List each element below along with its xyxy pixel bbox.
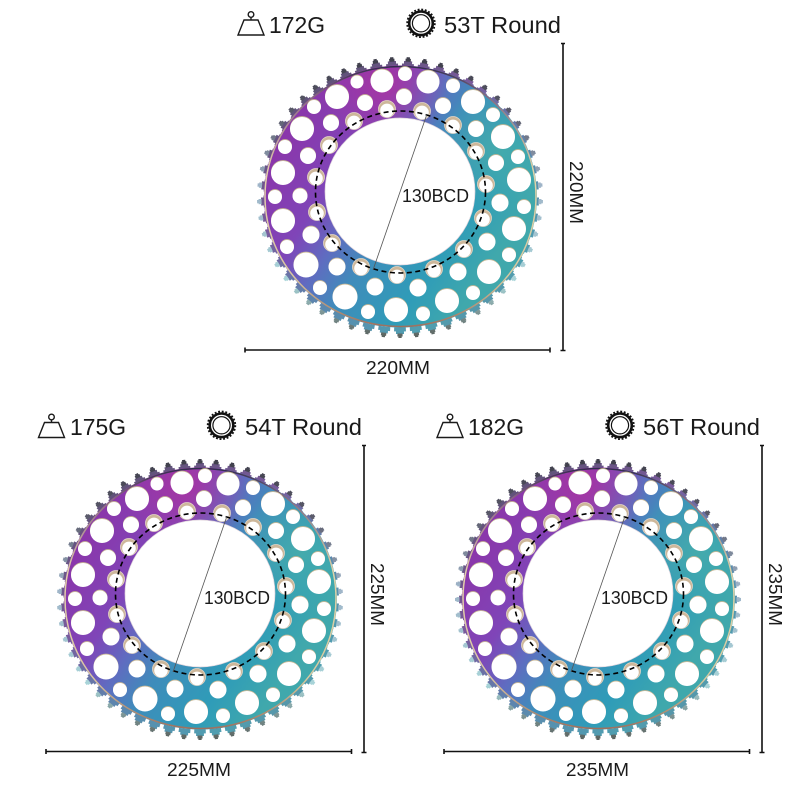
height dimension line xyxy=(560,43,566,350)
chainring: 56 teeth xyxy=(456,460,740,739)
tooth count label: 56T Round xyxy=(606,412,760,440)
BCD label: 130BCD xyxy=(402,186,469,206)
height label: 235MM xyxy=(765,563,785,626)
tooth count label: 54T Round xyxy=(208,412,362,440)
width dimension line xyxy=(444,749,750,754)
width label: 235MM xyxy=(566,760,629,780)
tooth count label: 53T Round: 53T Round xyxy=(444,12,561,38)
width label: 225MM xyxy=(167,760,231,780)
height dimension line xyxy=(760,445,764,752)
chainring: 54 teeth xyxy=(58,460,342,739)
BCD label: 130BCD xyxy=(204,588,270,608)
panel: 53T chainring xyxy=(238,9,586,378)
chainring: 53 teeth xyxy=(258,58,542,337)
weight label: 172G: 172G xyxy=(269,12,325,38)
tooth count label: 56T Round: 56T Round xyxy=(643,414,760,440)
width label: 220MM xyxy=(366,358,430,378)
panel: 54T chainring xyxy=(38,412,387,780)
width dimension line xyxy=(245,348,550,352)
BCD label: 130BCD xyxy=(601,588,668,608)
weight label: 175G xyxy=(38,414,126,440)
tooth count label: 54T Round: 54T Round xyxy=(245,414,362,440)
tooth count label: 53T Round xyxy=(407,9,561,38)
panel: 56T chainring xyxy=(437,412,785,780)
weight label: 182G xyxy=(437,414,524,440)
weight label: 182G: 182G xyxy=(468,414,524,440)
height label: 225MM xyxy=(367,563,387,626)
weight label: 172G xyxy=(238,12,325,38)
height dimension line xyxy=(362,445,366,752)
weight label: 175G: 175G xyxy=(70,414,126,440)
height label: 220MM xyxy=(566,161,586,224)
width dimension line xyxy=(46,749,352,754)
